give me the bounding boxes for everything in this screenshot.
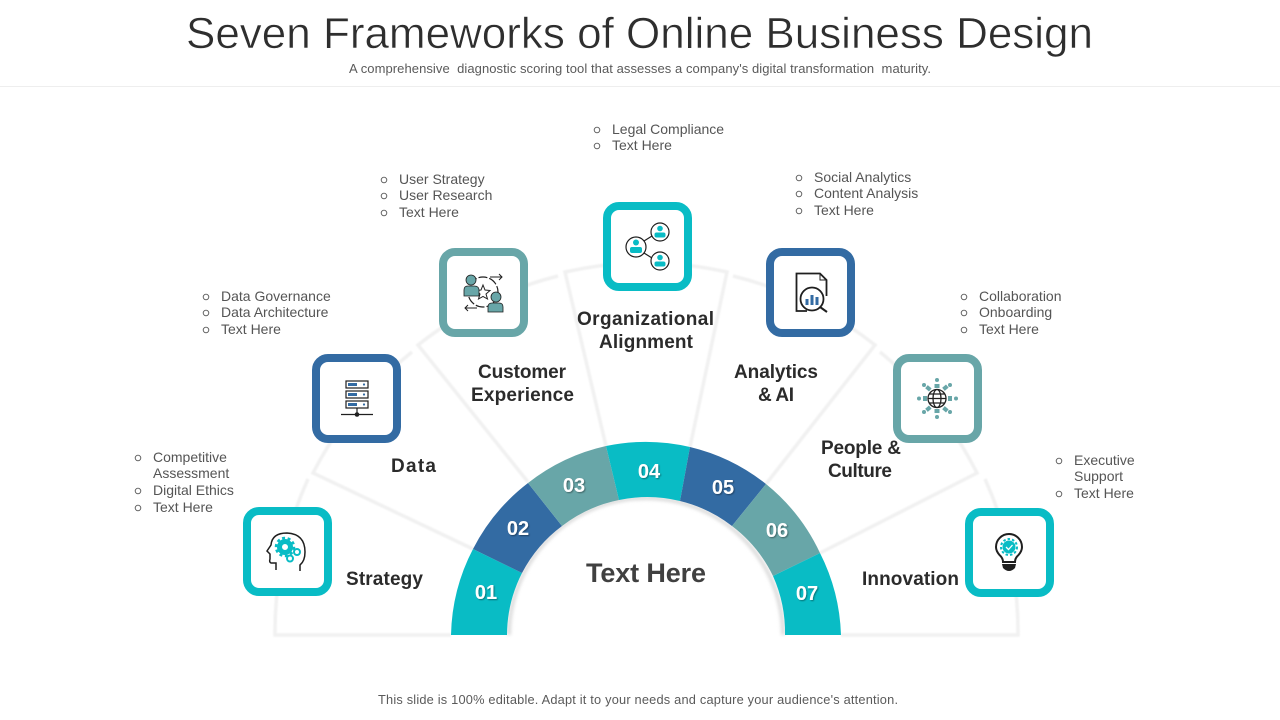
label: innovation: Innovation bbox=[862, 569, 959, 590]
list: analytics: Content Analysis bbox=[814, 185, 918, 201]
list: people and culture: Text Here bbox=[979, 321, 1039, 337]
semicircle ring of numbered segments bbox=[451, 442, 841, 635]
labels bbox=[346, 309, 959, 590]
icon: globe with people bbox=[917, 378, 958, 419]
icon tile: innovation bbox=[969, 512, 1050, 593]
label: people and culture: People & bbox=[821, 438, 901, 459]
list: innovation bbox=[1056, 452, 1135, 501]
icon tile: data bbox=[316, 358, 397, 439]
list: innovation: Text Here bbox=[1074, 485, 1134, 501]
icon: head with gears bbox=[267, 533, 305, 571]
label: organizational alignment: Organizational bbox=[577, 309, 714, 330]
segment 01: 01 bbox=[475, 582, 497, 604]
icon: light bulb bbox=[996, 534, 1022, 571]
title: Seven Frameworks of Online Business Design bbox=[186, 9, 1093, 58]
label: analytics and AI: & AI bbox=[758, 385, 794, 406]
label: organizational alignment bbox=[577, 309, 714, 353]
segment 05: 05 bbox=[712, 477, 734, 499]
segment 07: 07 bbox=[796, 583, 818, 605]
segment 03: 03 bbox=[563, 475, 585, 497]
list: competitive: Competitive bbox=[153, 449, 227, 465]
label: customer experience: Customer bbox=[478, 362, 567, 383]
segment 01 bbox=[451, 549, 522, 635]
list: data: Text Here bbox=[221, 321, 281, 337]
segment 02: 02 bbox=[507, 518, 529, 540]
icon: server rack bbox=[341, 381, 373, 417]
segment 06 bbox=[732, 484, 820, 576]
list: organizational alignment: Legal Compliance bbox=[612, 121, 724, 137]
center label: Text Here bbox=[586, 558, 706, 588]
list: competitive: Assessment bbox=[153, 465, 229, 481]
icon tile: people and culture bbox=[897, 358, 978, 439]
list: people and culture: Collaboration bbox=[979, 288, 1062, 304]
list: analytics: Social Analytics bbox=[814, 169, 911, 185]
label: people and culture: Culture bbox=[828, 461, 892, 482]
list: customer experience: User Research bbox=[399, 187, 492, 203]
list: customer experience bbox=[381, 171, 492, 220]
background fan of seven wedges bbox=[275, 263, 1018, 635]
icon tile: strategy bbox=[247, 511, 328, 592]
list: innovation: Support bbox=[1074, 468, 1123, 484]
list: data bbox=[203, 288, 331, 337]
icon: people around gear bbox=[464, 274, 503, 312]
list: organizational alignment: Text Here bbox=[612, 137, 672, 153]
label: strategy: Strategy bbox=[346, 569, 423, 590]
segment 03 bbox=[528, 446, 619, 526]
icon: connected people bbox=[626, 223, 669, 270]
segment 02 bbox=[473, 483, 562, 573]
list: competitive: Text Here bbox=[153, 499, 213, 515]
icon tile: analytics and AI bbox=[770, 252, 851, 333]
list: people and culture bbox=[961, 288, 1062, 337]
segment 04 bbox=[606, 442, 690, 501]
icon tile: organizational alignment bbox=[607, 206, 688, 287]
label: customer experience: Experience bbox=[471, 385, 574, 406]
list: competitive: Digital Ethics bbox=[153, 482, 234, 498]
label: people and culture bbox=[821, 438, 901, 482]
label: analytics and AI: Analytics bbox=[734, 362, 818, 383]
label: analytics and AI bbox=[734, 362, 818, 406]
list: data: Data Architecture bbox=[221, 304, 329, 320]
subtitle: A comprehensive diagnostic scoring tool that assesses a company's digital transformation maturity. bbox=[349, 61, 931, 76]
label: customer experience bbox=[471, 362, 574, 406]
segment 04: 04 bbox=[638, 461, 661, 483]
list: data: Data Governance bbox=[221, 288, 331, 304]
list: innovation: Executive bbox=[1074, 452, 1135, 468]
icon: document with magnifier bbox=[796, 274, 827, 312]
segment 05 bbox=[680, 447, 766, 526]
list: analytics bbox=[796, 169, 918, 218]
list: customer experience: User Strategy bbox=[399, 171, 485, 187]
list: people and culture: Onboarding bbox=[979, 304, 1052, 320]
footer note: This slide is 100% editable. Adapt it to your needs and capture your audience's attention. bbox=[378, 692, 898, 707]
segment 07 bbox=[773, 553, 841, 635]
list: competitive bbox=[135, 449, 234, 515]
list: analytics: Text Here bbox=[814, 202, 874, 218]
icon tile: customer experience bbox=[443, 252, 524, 333]
label: data: Data bbox=[391, 456, 436, 477]
label: organizational alignment: Alignment bbox=[599, 332, 694, 353]
segment 06: 06 bbox=[766, 520, 788, 542]
list: organizational alignment bbox=[594, 121, 724, 153]
list: customer experience: Text Here bbox=[399, 204, 459, 220]
